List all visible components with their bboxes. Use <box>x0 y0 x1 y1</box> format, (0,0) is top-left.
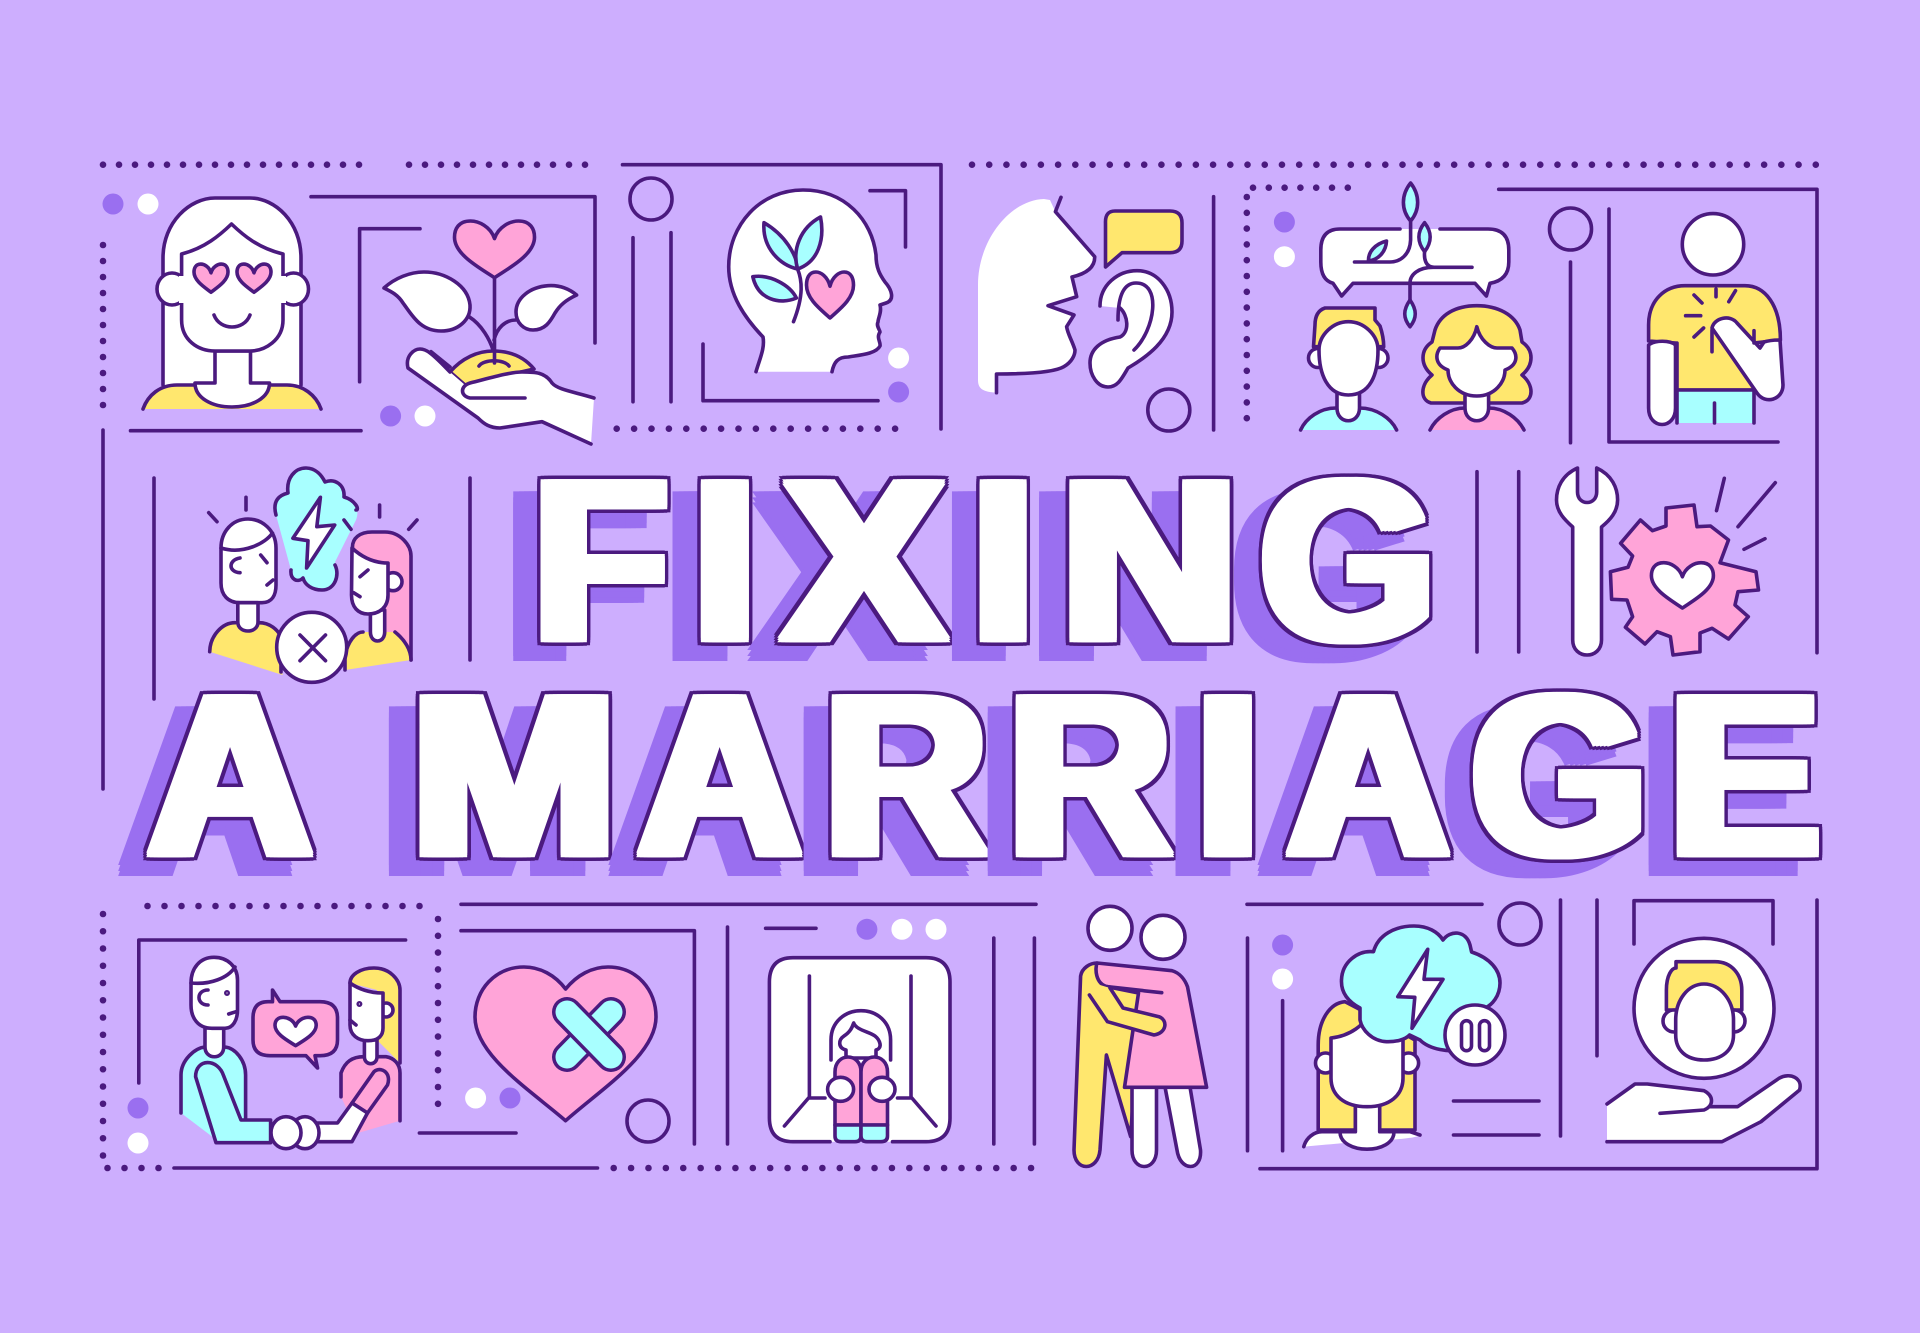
title line: A MARRIAGE: I <box>1196 646 1259 904</box>
icon: arguing couple with lightning cloud <box>209 468 417 682</box>
icon: wrench and heart gear <box>1556 468 1775 655</box>
icon: couple shaking hands with heart bubble <box>181 957 400 1149</box>
title line: FIXING: I <box>693 431 756 689</box>
title line: FIXING: G <box>1260 431 1436 689</box>
title line: FIXING: X <box>783 431 945 689</box>
title line: A MARRIAGE: A <box>638 646 801 904</box>
icon: woman with heart eyes <box>143 198 321 409</box>
icon: speaking face and listening ear <box>978 197 1182 393</box>
decorative frame lines and dotted rules <box>103 165 1817 1169</box>
icon: heart with bandage <box>475 967 656 1121</box>
icon: head with leaves and heart <box>729 190 892 372</box>
accent dots <box>102 194 1295 1154</box>
title line: A MARRIAGE: M <box>411 646 617 904</box>
title line: A MARRIAGE: E <box>1669 646 1821 904</box>
icon: girl sitting alone in a room <box>769 958 950 1142</box>
title line: A MARRIAGE: A <box>148 646 312 904</box>
title line: FIXING: I <box>972 431 1034 689</box>
title line: FIXING: N <box>1061 431 1239 689</box>
title line: A MARRIAGE: A <box>1287 646 1450 904</box>
icon: woman with storm cloud and pause <box>1304 926 1505 1149</box>
title line: A MARRIAGE: R <box>824 646 988 904</box>
title line: A MARRIAGE <box>118 646 1822 904</box>
icon: heart plant in hand <box>384 221 594 444</box>
title line: FIXING <box>513 431 1436 689</box>
icon: couple sharing speech bubble with vine <box>1301 183 1531 430</box>
icon: man with hand on chest <box>1649 214 1783 424</box>
icon: hugging couple <box>1074 906 1207 1166</box>
icon: face in circle above open hand <box>1607 938 1800 1142</box>
title line: A MARRIAGE: R <box>1008 646 1172 904</box>
title line: FIXING: F <box>532 431 668 689</box>
outline circles <box>627 178 1592 1142</box>
title line: A MARRIAGE: G <box>1471 646 1648 904</box>
